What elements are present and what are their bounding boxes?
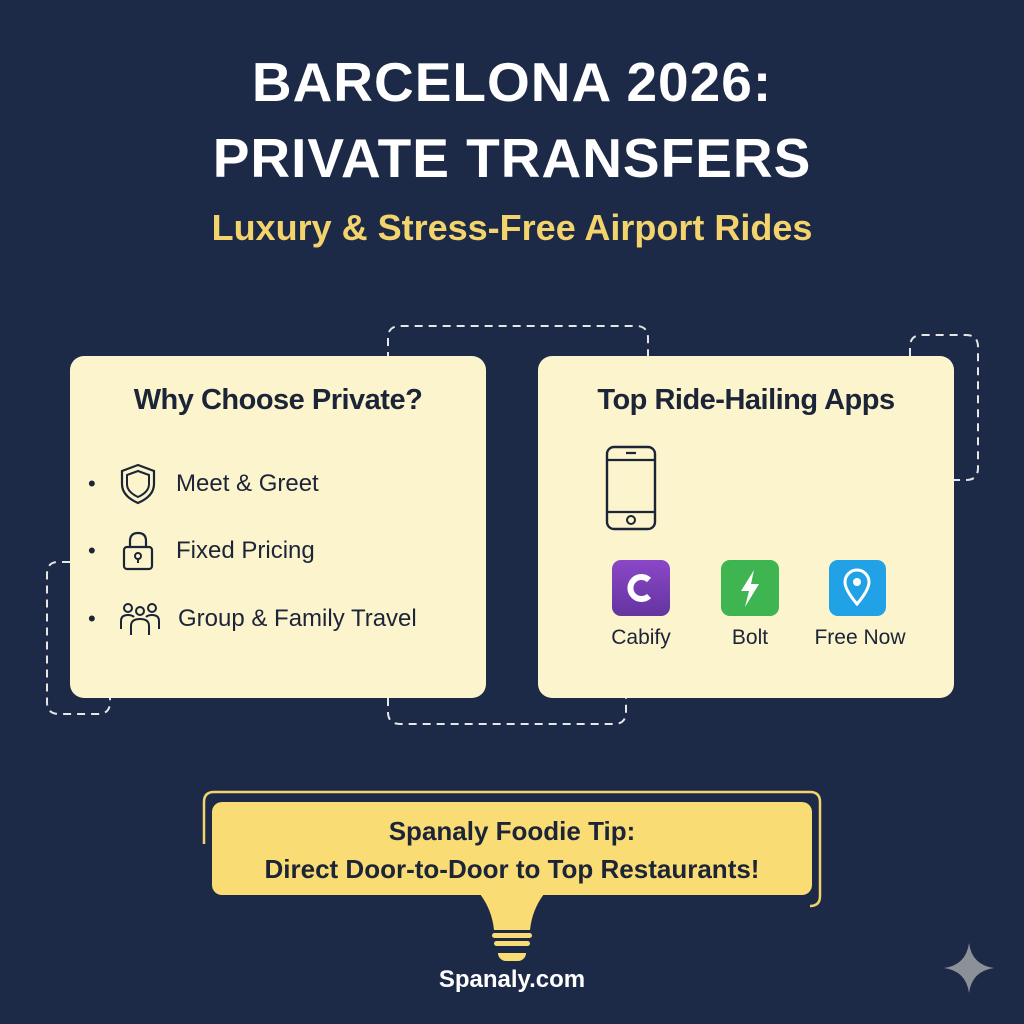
- item: group travel: Group & Family Travel: [178, 605, 417, 632]
- item: fixed pricing: Fixed Pricing: [176, 537, 315, 564]
- item: meet & greet: •: [88, 471, 96, 496]
- panel: why choose private: [70, 356, 486, 698]
- item: fixed pricing: •: [88, 538, 96, 563]
- subtitle: Luxury & Stress-Free Airport Rides: [212, 207, 812, 248]
- icon: bolt: [721, 560, 779, 616]
- panel: top ride-hailing apps: [538, 356, 954, 698]
- heading: why choose private: Why Choose Private?: [134, 384, 422, 416]
- footer: website: Spanaly.com: [439, 966, 585, 993]
- title: [213, 51, 811, 189]
- item: fixed pricing: [88, 532, 315, 570]
- icon: sparkle: [944, 943, 994, 993]
- label: bolt: Bolt: [732, 626, 768, 649]
- icon: smartphone: [606, 446, 656, 530]
- icon: bulb base: [498, 953, 526, 961]
- label: free now: Free Now: [814, 626, 906, 649]
- title: BARCELONA 2026:: [252, 51, 772, 113]
- icon: cabify: [612, 560, 670, 616]
- callout: foodie tip: [202, 790, 822, 946]
- text: tip: Spanaly Foodie Tip:: [389, 816, 635, 846]
- text: tip: Direct Door-to-Door to Top Restaurants!: [265, 854, 759, 884]
- title: PRIVATE TRANSFERS: [213, 127, 811, 189]
- icon: free now: [829, 560, 886, 616]
- text: tip: [265, 816, 759, 884]
- item: meet & greet: Meet & Greet: [176, 470, 319, 497]
- heading: apps: Top Ride-Hailing Apps: [597, 384, 895, 416]
- label: cabify: Cabify: [611, 626, 671, 649]
- item: group travel: [88, 603, 417, 635]
- item: group travel: •: [88, 606, 96, 631]
- item: meet & greet: [88, 464, 319, 504]
